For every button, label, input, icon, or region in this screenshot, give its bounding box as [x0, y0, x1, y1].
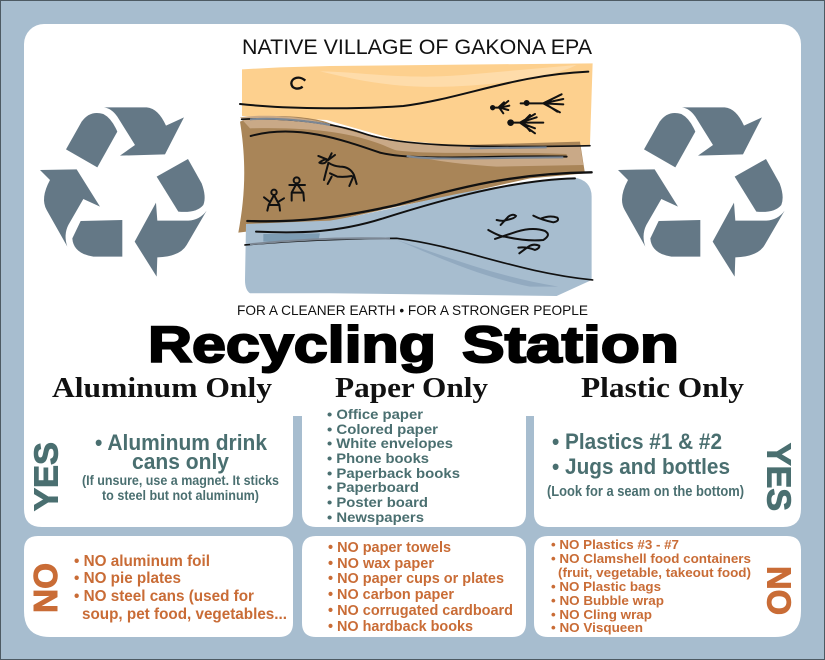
text: aluminum no list: soup, pet food, vegetables...	[82, 606, 287, 623]
text: paper no list: • NO corrugated cardboard	[328, 603, 513, 619]
label: no plastic: NO	[760, 566, 798, 615]
heading: organization: NATIVE VILLAGE OF GAKONA EPA	[242, 36, 592, 59]
text: plastic yes list	[547, 429, 744, 500]
text: aluminum yes list	[82, 430, 279, 503]
text: paper yes list: • Poster board	[327, 494, 428, 510]
tagline: FOR A CLEANER EARTH • FOR A STRONGER PEOPLE	[237, 302, 588, 318]
text: paper yes list: • Colored paper	[327, 421, 439, 437]
logo illustration	[238, 63, 593, 296]
label: no aluminum: NO	[27, 563, 64, 613]
text: aluminum no list: • NO aluminum foil	[74, 553, 210, 570]
text: paper yes list: • Paperboard	[327, 479, 419, 495]
icon: people	[264, 177, 305, 211]
text: paper no list: • NO wax paper	[328, 556, 434, 572]
text: plastic no list: • NO Clamshell food containers	[551, 551, 751, 566]
panel: paper yes	[302, 406, 526, 527]
divider strips	[293, 416, 302, 527]
panel: plastic no	[534, 536, 801, 637]
text: plastic yes list: • Plastics #1 & #2	[552, 429, 722, 454]
text: paper yes list: • White envelopes	[327, 435, 453, 451]
earth band	[238, 116, 585, 233]
text: aluminum no list	[74, 553, 287, 623]
text: plastic yes list: • Jugs and bottles	[552, 454, 730, 479]
text: paper yes list	[327, 406, 460, 525]
panel: aluminum yes	[24, 410, 293, 527]
label: yes aluminum: YES	[28, 442, 64, 511]
icon: birds	[491, 94, 563, 133]
sky band	[242, 63, 593, 149]
text: plastic yes list: (Look for a seam on the bottom)	[547, 484, 744, 500]
text: plastic no list: • NO Visqueen	[551, 620, 643, 635]
text: aluminum yes list: cans only	[132, 449, 229, 474]
heading: paper: Paper Only	[335, 372, 489, 404]
title: Recycling	[148, 316, 436, 373]
text: aluminum yes list: to steel but not aluminum)	[102, 488, 259, 503]
text: paper no list	[328, 540, 513, 635]
text: plastic no list: • NO Bubble wrap	[551, 593, 664, 608]
text: aluminum yes list: • Aluminum drink	[95, 430, 267, 455]
text: paper yes list: • Newspapers	[327, 509, 424, 525]
white main panel	[24, 24, 801, 444]
icon: fish	[488, 215, 558, 253]
river lines	[240, 72, 593, 280]
title	[148, 316, 679, 373]
heading: aluminum: Aluminum Only	[52, 372, 273, 404]
text: plastic no list: (fruit, vegetable, takeout food)	[558, 565, 751, 580]
heading: plastic: Plastic Only	[581, 372, 745, 404]
panel: plastic yes	[534, 410, 801, 527]
text: aluminum yes list: (If unsure, use a magnet. It sticks	[82, 473, 279, 488]
icon: caribou	[318, 153, 357, 186]
icon: recycling symbol left	[40, 107, 207, 277]
text: paper no list: • NO hardback books	[328, 619, 473, 635]
text: aluminum no list: • NO steel cans (used for	[74, 588, 254, 605]
text: paper yes list: • Paperback books	[327, 465, 460, 481]
water band	[245, 177, 592, 296]
text: plastic no list	[551, 537, 751, 635]
text: plastic no list: • NO Plastic bags	[551, 579, 661, 594]
icon: recycling symbol right	[618, 107, 785, 277]
title: Station	[462, 316, 679, 373]
text: plastic no list: • NO Plastics #3 - #7	[551, 537, 679, 552]
text: paper no list: • NO paper towels	[328, 540, 451, 556]
panel: paper no	[302, 536, 526, 637]
text: aluminum no list: • NO pie plates	[74, 570, 181, 587]
text: plastic no list: • NO Cling wrap	[551, 607, 652, 622]
text: paper yes list: • Office paper	[327, 406, 424, 422]
label: yes plastic: YES	[760, 443, 798, 511]
panel: aluminum no	[24, 536, 293, 637]
text: paper yes list: • Phone books	[327, 450, 429, 466]
icon: sun	[291, 78, 305, 89]
text: paper no list: • NO paper cups or plates	[328, 571, 504, 587]
text: paper no list: • NO carbon paper	[328, 587, 454, 603]
